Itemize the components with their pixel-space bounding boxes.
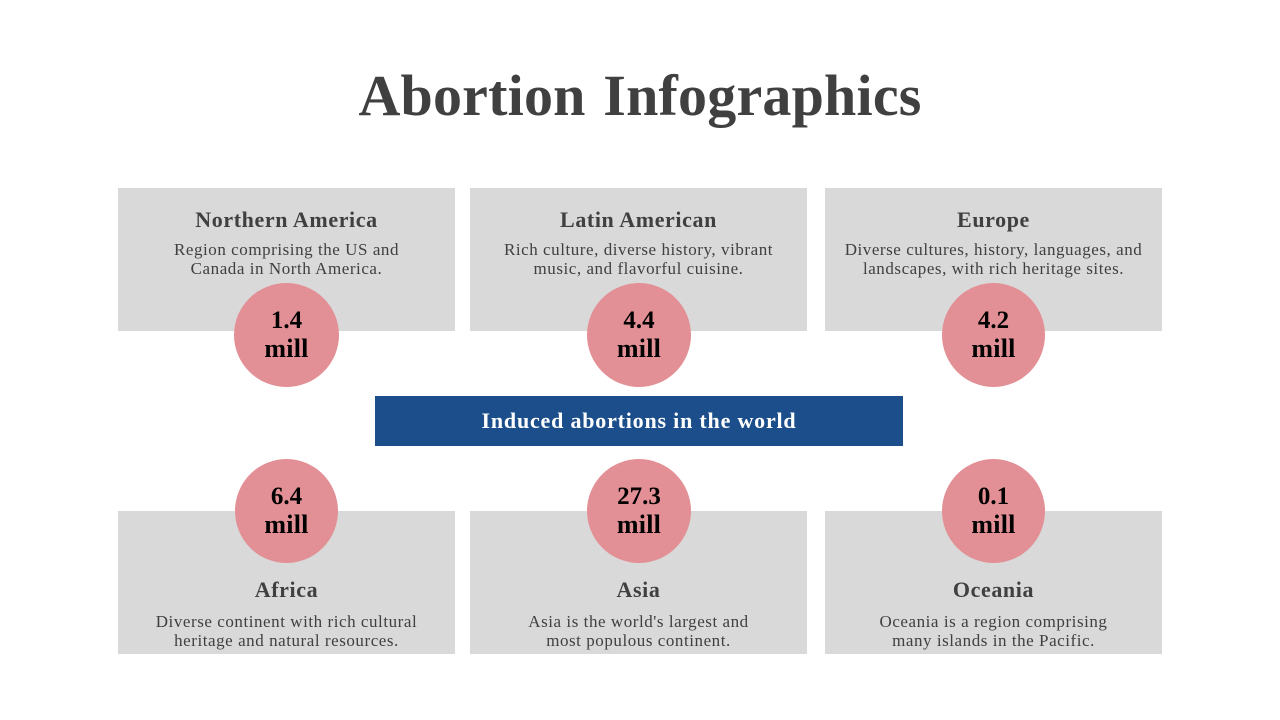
circle: 27.3 mill: 27.3 [617, 483, 661, 510]
panel: Latin American [470, 188, 807, 331]
heading: Northern America: Northern America [195, 207, 378, 232]
panel: Asia [470, 511, 807, 654]
text: Europe description: landscapes, with rich heritage sites. [863, 259, 1124, 278]
panel: Europe [825, 188, 1162, 331]
panel: Northern America [118, 188, 455, 331]
text: Africa description: Diverse continent with rich cultural [156, 612, 417, 631]
circle: 4.4 mill [587, 283, 691, 387]
circle: 4.4 mill: 4.4 [623, 307, 655, 334]
circle: 1.4 mill: mill [264, 334, 309, 363]
circle: 4.2 mill: mill [971, 334, 1016, 363]
text: Latin American description [504, 240, 773, 278]
title: Abortion Infographics [358, 63, 922, 128]
circle: 6.4 mill [235, 459, 338, 563]
text: Latin American description: Rich culture, diverse history, vibrant [504, 240, 773, 259]
circle: 27.3 mill [587, 459, 691, 563]
text: Europe description: Diverse cultures, history, languages, and [845, 240, 1142, 259]
text: Africa description: heritage and natural resources. [174, 631, 399, 650]
panel: Africa [118, 511, 455, 654]
panel: Oceania [825, 511, 1162, 654]
heading: Europe: Europe [957, 207, 1030, 232]
text: Asia description [528, 612, 749, 650]
banner: Induced abortions in the world: Induced abortions in the world [482, 408, 796, 433]
text: Oceania description: Oceania is a region comprising [880, 612, 1108, 631]
text: Asia description: most populous continent. [546, 631, 731, 650]
text: Latin American description: music, and flavorful cuisine. [534, 259, 743, 278]
circle: 4.4 mill: mill [617, 334, 661, 363]
circle: 4.2 mill: 4.2 [978, 307, 1009, 334]
circle: 1.4 mill: 1.4 [271, 307, 302, 334]
text: Europe description [845, 240, 1142, 278]
text: Northern America description: Canada in North America. [191, 259, 382, 278]
banner: Induced abortions in the world [375, 396, 903, 446]
heading: Asia: Asia [617, 577, 660, 602]
heading: Oceania: Oceania [953, 577, 1034, 602]
heading: Latin American: Latin American [560, 207, 717, 232]
circle: 1.4 mill [234, 283, 339, 387]
circle: 6.4 mill: 6.4 [271, 483, 302, 510]
circle: 27.3 mill: mill [617, 510, 661, 539]
heading: Africa: Africa [255, 577, 318, 602]
circle: 6.4 mill: mill [264, 510, 309, 539]
circle: 0.1 mill: 0.1 [978, 483, 1009, 510]
text: Northern America description: Region comprising the US and [174, 240, 399, 259]
text: Africa description [156, 612, 417, 650]
circle: 0.1 mill: mill [971, 510, 1016, 539]
text: Oceania description: many islands in the Pacific. [892, 631, 1095, 650]
text: Asia description: Asia is the world's largest and [528, 612, 749, 631]
text: Oceania description [880, 612, 1108, 650]
circle: 4.2 mill [942, 283, 1045, 387]
text: Northern America description [174, 240, 399, 278]
circle: 0.1 mill [942, 459, 1045, 563]
